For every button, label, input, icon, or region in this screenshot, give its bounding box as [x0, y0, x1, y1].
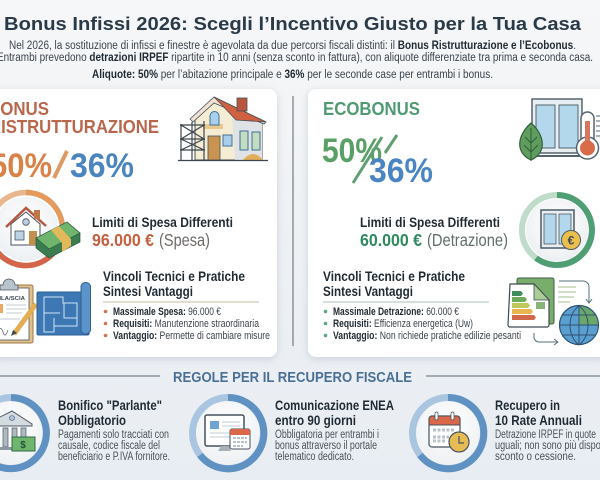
icon: donut with house and cash	[0, 192, 80, 266]
bullet list: Vantaggio: Non richiede pratiche edilizie pesanti	[333, 330, 521, 342]
spending limit text: 60.000 €	[360, 230, 422, 250]
spending limit text: 96.000 €	[92, 230, 154, 250]
constraints heading: Vincoli Tecnici e Pratiche	[103, 268, 245, 284]
icon: clipboard CILA/SCIA	[0, 279, 36, 343]
rule 3 text: Recupero in	[495, 397, 560, 413]
rates 50/36	[0, 147, 134, 185]
icon: house with scaffolding	[178, 97, 268, 160]
bullet list: Requisiti: Manutenzione straordinaria	[113, 318, 260, 330]
icon: monitor and calendar	[192, 397, 264, 469]
rule 1 text: Pagamenti solo tracciati con	[58, 429, 169, 441]
spending limit text	[360, 214, 508, 250]
rule 1: bank transfer	[0, 397, 170, 469]
icon: bank and banknote: $	[20, 440, 26, 451]
spending limit text: Limiti di Spesa Differenti	[92, 214, 233, 230]
constraints heading: Sintesi Vantaggi	[323, 283, 413, 299]
rule 1 text: beneficiario e P.IVA fornitore.	[58, 451, 170, 463]
rule 1 text: Bonifico "Parlante"	[58, 397, 162, 413]
rule 1 text: Obbligatorio	[58, 412, 126, 428]
spending limit text: Limiti di Spesa Differenti	[360, 214, 500, 230]
rates 50/36	[322, 132, 433, 190]
rule 3 text	[495, 397, 600, 463]
panel heading	[0, 98, 159, 137]
panel: Bonus Ristrutturazione	[0, 89, 277, 357]
bullet list	[324, 306, 521, 342]
constraints heading: Vincoli Tecnici e Pratiche	[323, 268, 465, 284]
bullet list: Vantaggio: Permette di cambiare misure	[113, 330, 270, 342]
rule 3 text: sconto o cessione.	[495, 451, 576, 463]
rule 2 text	[275, 397, 394, 463]
rule 1 text: causale, codice fiscale del	[58, 440, 160, 452]
spending limit text	[92, 214, 233, 250]
title: Bonus Infissi 2026: Scegli l’Incentivo Giusto per la Tua Casa	[4, 13, 582, 34]
rates 50/36: 36%	[369, 152, 433, 190]
constraints heading	[103, 268, 245, 299]
panel heading: ECOBONUS	[323, 98, 420, 119]
rates 50/36: 36%	[70, 147, 134, 185]
rule 2: ENEA	[192, 397, 394, 469]
icon: donut with window and euro coin: €	[568, 234, 575, 248]
rule 2 text: bonus attraverso il portale	[275, 440, 377, 452]
constraints heading	[323, 268, 465, 299]
icon: calendar and clock	[412, 397, 484, 469]
icon: donut with window and euro coin	[522, 195, 592, 265]
rule 2 text: Comunicazione ENEA	[275, 397, 394, 413]
icon: bank and banknote	[0, 398, 46, 469]
rule 3: annual instalments	[412, 397, 600, 469]
bullet list: Massimale Spesa: 96.000 €	[113, 306, 221, 318]
intro paragraph: Aliquote: 50% per l’abitazione principale e 36% per le seconde case per entrambi i bonus.	[92, 69, 493, 81]
rule 2 text: Obbligatoria per entrambi i	[275, 429, 379, 441]
icon: window, leaf and thermometer	[520, 99, 600, 161]
intro paragraph: Nel 2026, la sostituzione di infissi e finestre è agevolata da due percorsi fiscali distinti: il Bonus Ristrutturazione e l’Ecobonus.	[9, 40, 576, 52]
intro paragraph	[0, 40, 593, 81]
spending limit text: (Detrazione)	[427, 230, 508, 250]
rule 2 text: telematico dedicato.	[275, 451, 354, 463]
bullet list: Requisiti: Efficienza energetica (Uw)	[333, 318, 473, 330]
rates 50/36: 50%	[322, 132, 382, 170]
bullet list	[104, 306, 270, 342]
spending limit text: (Spesa)	[159, 230, 210, 250]
constraints heading: Sintesi Vantaggi	[103, 283, 193, 299]
bullet list: Massimale Detrazione: 60.000 €	[333, 306, 459, 318]
rule 2 text: entro 90 giorni	[275, 412, 356, 428]
icon: energy certificate and globe	[508, 278, 598, 345]
rule 3 text: 10 Rate Annuali	[495, 412, 582, 428]
section heading: rules: REGOLE PER IL RECUPERO FISCALE	[173, 370, 412, 386]
icon: blueprint	[37, 283, 91, 335]
panel: Ecobonus	[308, 89, 600, 357]
rule 1 text	[58, 397, 170, 463]
